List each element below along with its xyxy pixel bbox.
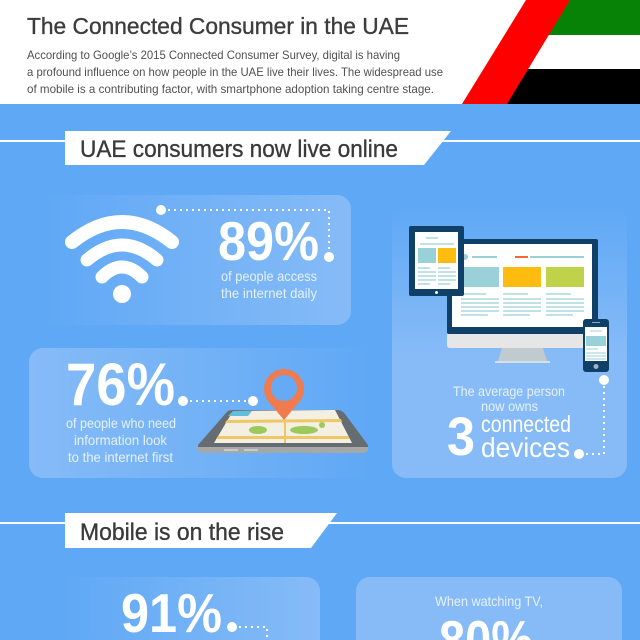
stat: 3 connected devices: connected xyxy=(481,411,571,437)
section heading: Mobile is on the rise xyxy=(0,513,640,548)
stat description xyxy=(453,383,565,414)
intro text xyxy=(27,48,443,96)
stat description: the internet daily xyxy=(221,285,317,301)
panel: information search xyxy=(29,348,375,478)
intro text: a profound influence on how people in the UAE live their lives. The widespread use xyxy=(27,65,443,79)
stat description: information look xyxy=(74,432,168,448)
connector xyxy=(227,622,267,640)
stat description xyxy=(221,268,317,301)
intro text: According to Google’s 2015 Connected Consumer Survey, digital is having xyxy=(27,48,400,62)
icon: wifi xyxy=(72,222,172,303)
panel: internet daily xyxy=(40,195,351,325)
stat description xyxy=(66,415,176,465)
icon: smartphone xyxy=(583,319,609,372)
section heading: UAE consumers now live online: UAE consumers now live online xyxy=(80,136,398,163)
stat description: of people who need xyxy=(66,415,176,431)
panel: watching TV xyxy=(356,577,622,640)
stat description: to the internet first xyxy=(68,449,173,465)
section heading: UAE consumers now live online xyxy=(0,131,640,165)
section heading: Mobile is on the rise: Mobile is on the rise xyxy=(80,519,284,546)
stat: 3 connected devices: devices xyxy=(481,432,570,463)
panel: 91% xyxy=(60,577,320,640)
connector xyxy=(178,396,258,406)
title: The Connected Consumer in the UAE xyxy=(27,13,409,39)
stat description: of people access xyxy=(221,268,317,284)
icon: phone with map and pin xyxy=(198,369,368,453)
stat: 89%: 89% xyxy=(218,210,319,272)
stat description: The average person xyxy=(453,383,565,399)
stat description: When watching TV, xyxy=(435,593,543,609)
icon: UAE flag xyxy=(462,0,640,104)
icon: tablet xyxy=(409,226,464,296)
intro text: of mobile is a contributing factor, with smartphone adoption taking centre stage. xyxy=(27,82,434,96)
connector xyxy=(574,375,609,459)
panel: connected devices xyxy=(392,205,627,478)
connector xyxy=(156,205,334,262)
icon: desktop monitor xyxy=(447,239,598,363)
stat: 3 connected devices: 3 xyxy=(447,407,475,467)
stat: 3 connected devices xyxy=(447,407,571,467)
stat description: now owns xyxy=(481,398,538,414)
stat: 76%: 76% xyxy=(66,351,175,418)
header panel xyxy=(0,0,640,104)
